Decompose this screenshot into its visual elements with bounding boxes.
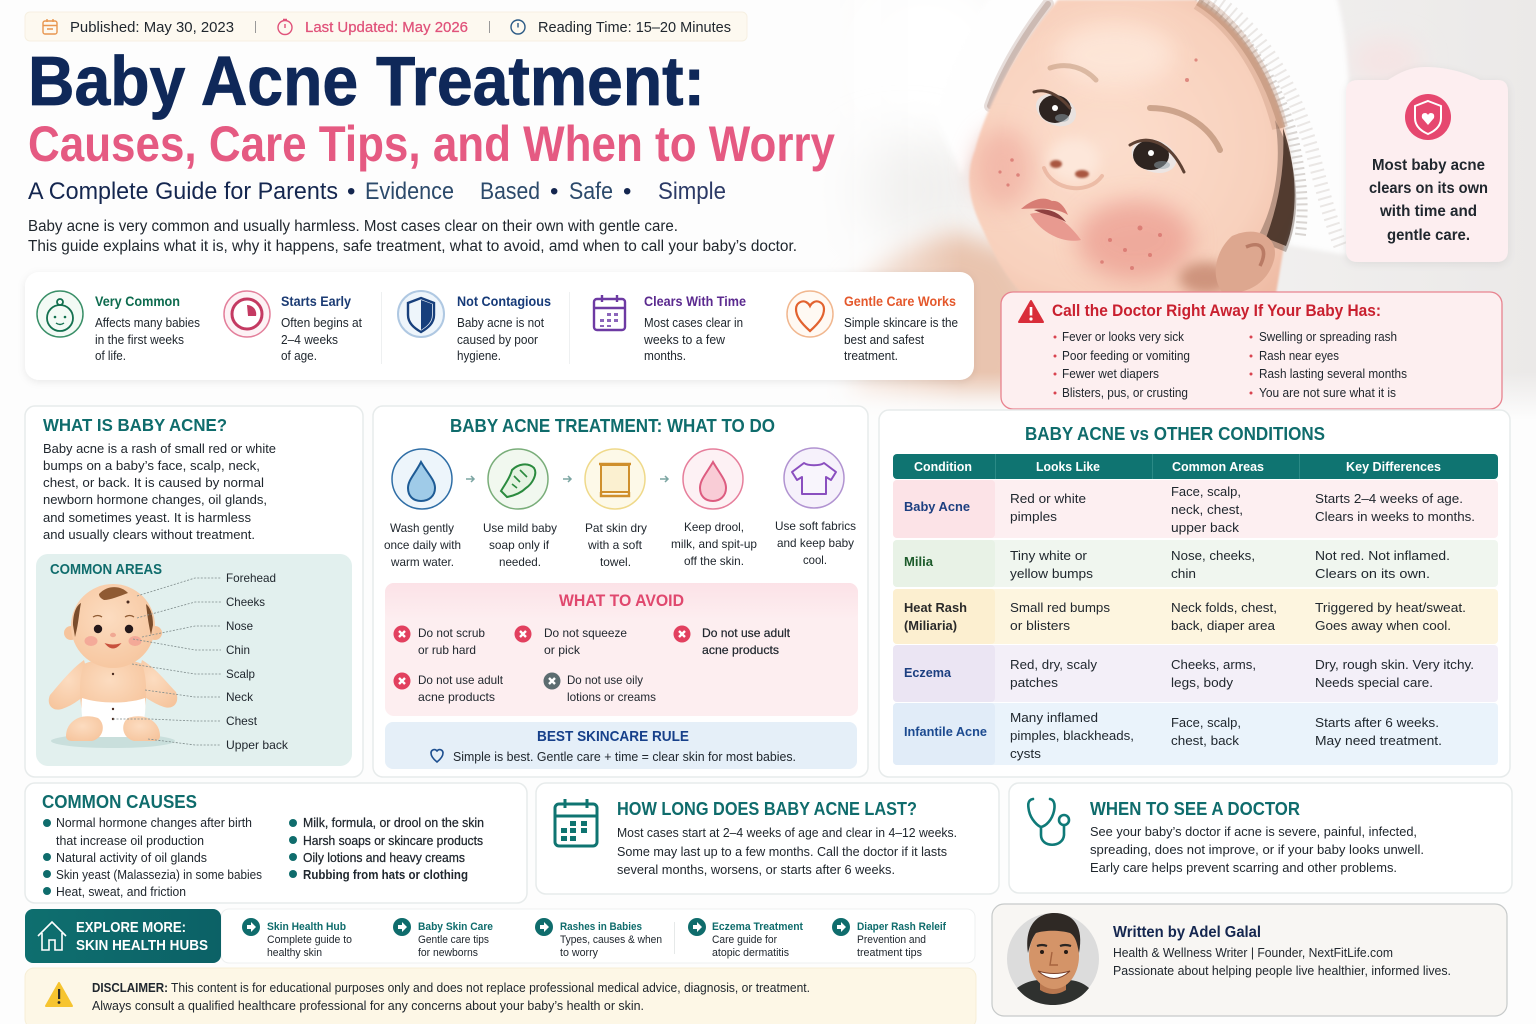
- row: milia: chin: [1171, 566, 1196, 581]
- intro paragraph: [28, 218, 797, 255]
- row: eczema: Red, dry, scaly: [1010, 657, 1098, 672]
- publication meta bar: [25, 12, 747, 41]
- author bio: [1113, 945, 1451, 978]
- avoid: squeeze: or pick: [544, 643, 581, 657]
- row: heat rash: back, diaper area: [1171, 618, 1276, 633]
- row: heat rash: Triggered by heat/sweat.: [1315, 600, 1466, 615]
- row: milia: Tiny white or: [1010, 548, 1088, 563]
- definition text: newborn hormone changes, oil glands,: [43, 492, 267, 507]
- avoid: adult products: acne products: [702, 643, 779, 657]
- fact: starts early: [224, 291, 362, 363]
- panel: common areas: [36, 554, 352, 766]
- fact: starts early: of age.: [281, 348, 317, 363]
- step: pat dry: Pat skin dry: [585, 521, 647, 535]
- tagline: A Complete Guide for Parents: [28, 178, 338, 205]
- row: baby acne: Clears in weeks to months.: [1315, 509, 1475, 524]
- icon: calendar: [43, 19, 57, 34]
- row: milia: yellow bumps: [1010, 566, 1094, 581]
- step: pat dry: with a soft: [587, 538, 643, 552]
- warning signs list: [1054, 329, 1407, 400]
- row: baby acne: Red or white: [1010, 491, 1086, 506]
- avoid: scrub: [394, 626, 485, 657]
- hub: baby skin care: Baby Skin Care: [418, 921, 493, 933]
- author name: Written by Adel Galal: [1113, 924, 1261, 941]
- button: explore more: [25, 909, 221, 963]
- heading: WHEN TO SEE A DOCTOR: [1090, 799, 1300, 819]
- row: heat rash: or blisters: [1010, 618, 1071, 633]
- definition text: bumps on a baby’s face, scalp, neck,: [43, 458, 260, 473]
- icon: calendar: [555, 799, 597, 846]
- step: mild soap: soap only if: [489, 538, 550, 552]
- causes list: Rubbing from hats or clothing: [303, 867, 468, 882]
- avoid: oily lotions: Do not use oily: [567, 673, 643, 687]
- hub: eczema treatment: atopic dermatitis: [712, 947, 789, 959]
- doctor text: Early care helps prevent scarring and other problems.: [1090, 860, 1397, 875]
- area labels: Upper back: [226, 738, 289, 752]
- fact: clears with time: Most cases clear in: [644, 315, 743, 330]
- illustration: baby: [49, 584, 177, 748]
- fact: clears with time: weeks to a few: [643, 332, 726, 347]
- row: infantile acne: chest, back: [1171, 733, 1240, 748]
- icon: heart: [431, 750, 443, 762]
- avoid: adult products 2: acne products: [418, 690, 495, 704]
- arrow: [660, 476, 668, 482]
- causes list: [43, 815, 484, 899]
- warning signs list: Rash lasting several months: [1259, 366, 1407, 381]
- avoid: adult products 2: Do not use adult: [418, 673, 504, 687]
- step: keep drool off: off the skin.: [684, 554, 744, 568]
- doctor text: spreading, does not improve, or if your baby looks unwell.: [1090, 842, 1424, 857]
- hub: rashes in babies: to worry: [560, 947, 598, 959]
- step: pat dry: [585, 449, 647, 569]
- area labels: Nose: [226, 619, 253, 633]
- callout: most baby acne clears: [1346, 67, 1508, 262]
- hub: skin health: Complete guide to: [267, 934, 352, 946]
- fact: clears with time: months.: [644, 348, 686, 363]
- callout text: clears on its own: [1369, 180, 1488, 197]
- icon: warning triangle: [1019, 301, 1043, 322]
- row: eczema: Eczema: [904, 665, 952, 680]
- title: Baby Acne Treatment:: [28, 42, 705, 120]
- hub: rashes in babies: Rashes in Babies: [560, 921, 642, 933]
- avoid: scrub: or rub hard: [418, 643, 476, 657]
- heading: WHAT IS BABY ACNE?: [43, 415, 227, 435]
- row: eczema: Dry, rough skin. Very itchy.: [1315, 657, 1474, 672]
- step: wash gently: [384, 449, 461, 569]
- avoid: scrub: Do not scrub: [418, 626, 485, 640]
- row: infantile acne: Infantile Acne: [904, 724, 987, 739]
- heading: BABY ACNE TREATMENT: WHAT TO DO: [450, 416, 775, 436]
- step: wash gently: Wash gently: [390, 521, 454, 535]
- row: heat rash: Neck folds, chest,: [1171, 600, 1277, 615]
- row: heat rash: Goes away when cool.: [1315, 618, 1451, 633]
- intro paragraph: Baby acne is very common and usually harmless. Most cases clear on their own with gentle care.: [28, 218, 678, 235]
- panel: what to avoid: [385, 583, 858, 716]
- subtitle: Causes, Care Tips, and When to Worry: [28, 116, 835, 172]
- fact: very common: in the first weeks: [95, 332, 184, 347]
- last updated: Last Updated: May 2026: [305, 19, 468, 36]
- row: eczema: patches: [1010, 675, 1059, 690]
- fact: clears with time: Clears With Time: [644, 293, 746, 309]
- step: mild soap: Use mild baby: [483, 521, 557, 535]
- hub: baby skin care: for newborns: [418, 947, 478, 959]
- heading: BABY ACNE vs OTHER CONDITIONS: [1025, 423, 1325, 444]
- fact: very common: of life.: [95, 348, 126, 363]
- fact: not contagious: hygiene.: [457, 348, 501, 363]
- hero photo: baby wrapped in a towel: [800, 0, 1536, 420]
- avoid: adult products: Do not use adult: [702, 626, 791, 640]
- definition text: Baby acne is a rash of small red or white: [43, 441, 276, 456]
- hub: eczema treatment: Care guide for: [712, 934, 777, 946]
- avoid: squeeze: [514, 626, 627, 657]
- causes list: Milk, formula, or drool on the skin: [303, 815, 484, 830]
- table header: Key Differences: [1346, 459, 1441, 474]
- tagline: •: [550, 178, 558, 205]
- causes list: Heat, sweat, and friction: [56, 884, 186, 899]
- heading: COMMON CAUSES: [42, 792, 197, 812]
- row: baby acne: pimples: [1010, 509, 1058, 524]
- warning signs list: You are not sure what it is: [1259, 385, 1396, 400]
- callout text: [1369, 157, 1488, 244]
- row: baby acne: Face, scalp,: [1171, 484, 1241, 499]
- callout: call the doctor right away: [1001, 292, 1502, 409]
- row: infantile acne: [893, 703, 1498, 765]
- fact: clears with time: [594, 293, 746, 363]
- row: milia: [893, 540, 1498, 587]
- causes list: Harsh soaps or skincare products: [303, 833, 483, 848]
- hub: diaper rash: treatment tips: [857, 947, 922, 959]
- fact: gentle care works: [787, 291, 958, 363]
- panel: best skincare rule: Simple is best. Gentle care + time = clear skin for most babies.: [453, 749, 796, 764]
- panel: hub links: [221, 909, 975, 963]
- warning signs list: Poor feeding or vomiting: [1062, 348, 1190, 363]
- disclaimer text: Always consult a qualified healthcare professional for any concerns about your baby’s health or skin.: [92, 998, 644, 1013]
- icon: clock: [511, 20, 525, 34]
- panel: disclaimer: [25, 968, 976, 1024]
- author bio: Passionate about helping people live healthier, informed lives.: [1113, 963, 1451, 978]
- area labels: Neck: [226, 690, 254, 704]
- row: eczema: legs, body: [1171, 675, 1234, 690]
- panel: best skincare rule: [385, 722, 857, 769]
- disclaimer text: DISCLAIMER:: [92, 980, 168, 995]
- disclaimer text: This content is for educational purposes only and does not replace professional medical advice, diagnosis, or treatment.: [171, 980, 810, 995]
- button text: SKIN HEALTH HUBS: [76, 938, 208, 954]
- panel: comparison table: [879, 410, 1510, 777]
- step: mild soap: needed.: [499, 555, 541, 569]
- row: milia: Milia: [904, 554, 934, 569]
- step: keep drool off: milk, and spit-up: [671, 537, 757, 551]
- icon: shield with heart: [1405, 94, 1451, 140]
- row: infantile acne: cysts: [1010, 746, 1042, 761]
- step: wash gently: once daily with: [384, 538, 461, 552]
- warning signs list: Fever or looks very sick: [1062, 329, 1184, 344]
- fact: starts early: 2–4 weeks: [281, 332, 338, 347]
- arrow: [466, 476, 474, 482]
- area labels: Cheeks: [226, 595, 265, 609]
- causes list: Skin yeast (Malassezia) in some babies: [56, 867, 262, 882]
- table header: [893, 454, 1498, 479]
- row: baby acne: Baby Acne: [904, 499, 970, 514]
- fact: gentle care works: best and safest: [844, 332, 924, 347]
- step: keep drool off: Keep drool,: [684, 520, 744, 534]
- tagline: [28, 178, 726, 205]
- hub: baby skin care: Gentle care tips: [418, 934, 489, 946]
- heading: WHAT TO AVOID: [559, 592, 684, 610]
- step: wash gently: warm water.: [390, 555, 454, 569]
- causes list: Normal hormone changes after birth: [56, 815, 252, 830]
- callout text: gentle care.: [1387, 227, 1470, 244]
- fact: not contagious: [398, 291, 551, 363]
- fact: very common: Affects many babies: [95, 315, 200, 330]
- table header: Looks Like: [1036, 459, 1100, 474]
- hub: rashes in babies: Types, causes & when: [560, 934, 662, 946]
- panel: what to do: [373, 406, 868, 777]
- row: infantile acne: Starts after 6 weeks.: [1315, 715, 1439, 730]
- author bio: Health & Wellness Writer | Founder, NextFitLife.com: [1113, 945, 1393, 960]
- row: heat rash: [893, 589, 1498, 644]
- fact: starts early: Starts Early: [281, 293, 351, 309]
- fact: not contagious: caused by poor: [457, 332, 539, 347]
- row: infantile acne: Face, scalp,: [1171, 715, 1241, 730]
- avoid: adult products 2: [394, 672, 504, 704]
- button text: [76, 920, 208, 954]
- avoid: oily lotions: lotions or creams: [567, 690, 656, 704]
- panel: common causes: [25, 783, 527, 903]
- row: baby acne: [893, 480, 1498, 538]
- author portrait: [1007, 913, 1099, 1005]
- table header: Common Areas: [1172, 459, 1264, 474]
- intro paragraph: This guide explains what it is, why it happens, safe treatment, what to avoid, amd when to call your baby’s doctor.: [28, 238, 797, 255]
- button text: EXPLORE MORE:: [76, 920, 186, 936]
- area labels: Scalp: [226, 667, 255, 681]
- panel: what is baby acne: [25, 406, 363, 777]
- step: soft fabrics: and keep baby: [777, 536, 854, 550]
- fact: gentle care works: treatment.: [844, 348, 898, 363]
- arrow: [563, 476, 571, 482]
- row: milia: Clears on its own.: [1315, 566, 1430, 581]
- row: milia: Not red. Not inflamed.: [1315, 548, 1450, 563]
- duration text: several months, worsens, or starts after 6 weeks.: [617, 862, 895, 877]
- row: heat rash: (Miliaria): [904, 618, 957, 633]
- fact: starts early: Often begins at: [281, 315, 362, 330]
- row: infantile acne: pimples, blackheads,: [1010, 728, 1134, 743]
- icon: house: [38, 922, 66, 950]
- area labels: Chest: [226, 714, 258, 728]
- callout text: with time and: [1379, 203, 1477, 220]
- step: soft fabrics: cool.: [803, 553, 827, 567]
- definition text: [43, 441, 276, 542]
- heading: HOW LONG DOES BABY ACNE LAST?: [617, 799, 917, 819]
- hub: skin health: [242, 918, 352, 959]
- hub: rashes in babies: [535, 918, 662, 959]
- tagline: Evidence: [365, 178, 454, 205]
- warning signs list: Rash near eyes: [1259, 348, 1339, 363]
- icon: stethoscope: [1028, 799, 1069, 845]
- warning signs list: Fewer wet diapers: [1062, 366, 1159, 381]
- row: baby acne: neck, chest,: [1171, 502, 1243, 517]
- callout heading: Call the Doctor Right Away If Your Baby Has:: [1052, 302, 1381, 320]
- row: baby acne: upper back: [1171, 520, 1240, 535]
- step: mild soap: [483, 449, 557, 569]
- hub: diaper rash: Prevention and: [857, 934, 926, 946]
- panel: author: [992, 904, 1507, 1016]
- hub: eczema treatment: [688, 918, 803, 959]
- definition text: and usually clears without treatment.: [43, 527, 255, 542]
- step: soft fabrics: Use soft fabrics: [775, 519, 856, 533]
- table header: Condition: [914, 459, 972, 474]
- step: soft fabrics: [775, 448, 856, 567]
- tagline: Safe: [569, 178, 613, 205]
- hub: diaper rash: Diaper Rash Releif: [857, 921, 946, 933]
- panel: when to see a doctor: [1009, 783, 1512, 893]
- avoid: oily lotions: [544, 672, 656, 704]
- reading time: Reading Time: 15–20 Minutes: [538, 19, 731, 36]
- fact: very common: [37, 291, 200, 363]
- tagline: •: [347, 178, 355, 205]
- duration text: [617, 825, 957, 877]
- hub: diaper rash: [832, 918, 946, 959]
- tagline: •: [623, 178, 631, 205]
- row: eczema: [893, 645, 1498, 702]
- avoid: squeeze: Do not squeeze: [544, 626, 627, 640]
- hub: baby skin care: [393, 918, 493, 959]
- area labels: [226, 571, 289, 752]
- definition text: and sometimes yeast. It is harmless: [43, 510, 251, 525]
- duration text: Some may last up to a few months. Call the doctor if it lasts: [617, 844, 947, 859]
- icon: stopwatch: [278, 20, 292, 34]
- step: keep drool off: [671, 449, 757, 568]
- hub: skin health: healthy skin: [267, 947, 322, 959]
- definition text: chest, or back. It is caused by normal: [43, 475, 264, 490]
- row: infantile acne: May need treatment.: [1315, 733, 1442, 748]
- area labels: Chin: [226, 643, 250, 657]
- warning signs list: Swelling or spreading rash: [1259, 329, 1397, 344]
- causes list: Oily lotions and heavy creams: [303, 850, 465, 865]
- fact: gentle care works: Simple skincare is the: [844, 315, 958, 330]
- row: infantile acne: Many inflamed: [1010, 710, 1098, 725]
- fact: gentle care works: Gentle Care Works: [844, 293, 956, 309]
- row: baby acne: Starts 2–4 weeks of age.: [1315, 491, 1463, 506]
- fact: not contagious: Baby acne is not: [457, 315, 544, 330]
- icon: warning triangle: [46, 983, 72, 1006]
- heading: COMMON AREAS: [50, 562, 162, 578]
- row: eczema: Cheeks, arms,: [1171, 657, 1256, 672]
- hub: eczema treatment: Eczema Treatment: [712, 921, 803, 933]
- tagline: Simple: [658, 178, 726, 205]
- published date: Published: May 30, 2023: [70, 19, 234, 36]
- doctor text: [1090, 824, 1424, 875]
- disclaimer text: [92, 980, 810, 1013]
- causes list: that increase oil production: [56, 833, 204, 848]
- warning signs list: Blisters, pus, or crusting: [1062, 385, 1188, 400]
- area labels: Forehead: [226, 571, 276, 585]
- step: pat dry: towel.: [600, 555, 631, 569]
- row: eczema: Needs special care.: [1315, 675, 1433, 690]
- doctor text: See your baby’s doctor if acne is severe, painful, infected,: [1090, 824, 1417, 839]
- diagram leader lines: [113, 578, 221, 745]
- tagline: Based: [480, 178, 540, 205]
- panel: how long does it last: [536, 783, 999, 894]
- row: heat rash: Small red bumps: [1010, 600, 1111, 615]
- row: milia: Nose, cheeks,: [1171, 548, 1255, 563]
- duration text: Most cases start at 2–4 weeks of age and clear in 4–12 weeks.: [617, 825, 957, 840]
- hub: skin health: Skin Health Hub: [267, 921, 346, 933]
- callout text: Most baby acne: [1372, 157, 1485, 174]
- fact: very common: Very Common: [95, 293, 180, 309]
- row: heat rash: Heat Rash: [904, 600, 967, 615]
- panel: best skincare rule: BEST SKINCARE RULE: [537, 728, 689, 745]
- avoid: adult products: [674, 626, 791, 657]
- panel: key facts: [25, 272, 974, 380]
- causes list: Natural activity of oil glands: [56, 850, 207, 865]
- fact: not contagious: Not Contagious: [457, 293, 551, 309]
